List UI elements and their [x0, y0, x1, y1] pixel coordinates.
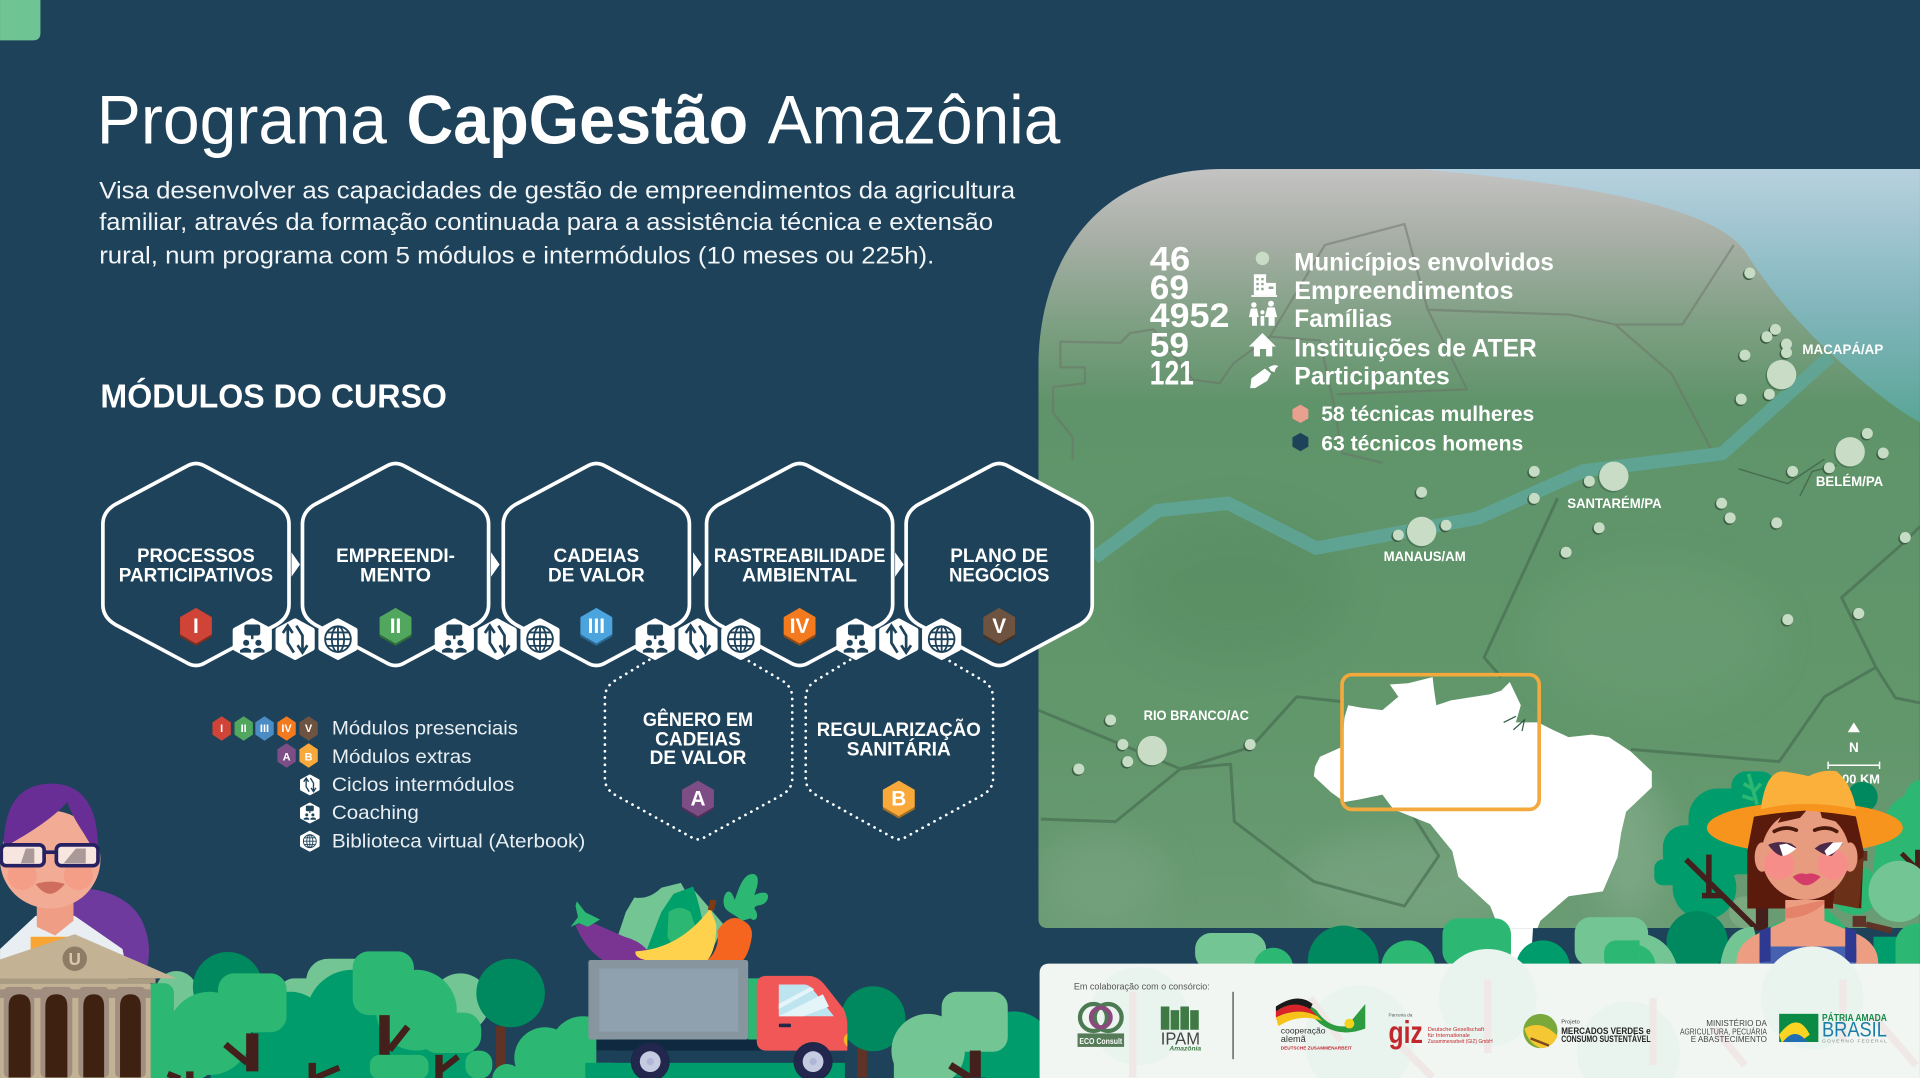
module IV [707, 463, 893, 665]
title: Programa [97, 81, 388, 158]
legend: I [220, 723, 223, 735]
illustration: vegetables [571, 874, 768, 960]
module titles: CADEIAS [553, 546, 639, 567]
compass and scale: N [1849, 740, 1859, 755]
module badges: I [193, 615, 199, 638]
legend [212, 716, 585, 852]
module badges: III [588, 615, 605, 638]
module titles: NEGÓCIOS [949, 565, 1049, 587]
logo: ECO Consult [1078, 1004, 1124, 1047]
river [1094, 356, 1830, 558]
logo: ministério [1680, 1019, 1768, 1044]
legend: Módulos presenciais [332, 719, 518, 740]
intro paragraph: rural, num programa com 5 módulos e intermódulos (10 meses ou 225h). [99, 242, 934, 269]
city labels: RIO BRANCO/AC [1144, 708, 1249, 723]
logo: cooperação alemã: DEUTSCHE ZUSAMMENARBEIT [1281, 1045, 1352, 1050]
illustration: map-edge forest [1040, 917, 1920, 997]
logo: pátria amada brasil [1779, 1013, 1887, 1045]
module badges: V [992, 615, 1006, 638]
logo: mercados verdes: CONSUMO SUSTENTÁVEL [1561, 1034, 1651, 1044]
illustration: right forest [1640, 771, 1920, 972]
stats: labels: Instituições de ATER [1294, 334, 1537, 362]
logo: giz: Zusammenarbeit (GIZ) GmbH [1428, 1039, 1493, 1045]
logo: ministério: AGRICULTURA, PECUÁRIA [1680, 1028, 1767, 1037]
extra module titles [643, 709, 981, 769]
compass and scale [1828, 722, 1880, 787]
logo: pátria amada brasil: PÁTRIA AMADA [1822, 1013, 1887, 1024]
logo: giz [1389, 1012, 1493, 1050]
stats: numbers: 46 [1150, 241, 1190, 279]
logo: pátria amada brasil: BRASIL [1822, 1018, 1887, 1041]
logo: cooperação alemã: cooperação [1281, 1025, 1326, 1035]
module badges [180, 608, 1015, 646]
module titles: RASTREABILIDADE [714, 546, 885, 567]
module titles: PROCESSOS [137, 546, 255, 567]
stats: labels [1294, 249, 1554, 390]
legend: II [241, 723, 247, 735]
panel: partner logos [1040, 946, 1920, 1078]
extra module titles: DE VALOR [650, 748, 747, 769]
legend: IV [281, 723, 292, 735]
stats: labels: Municípios envolvidos [1294, 249, 1554, 277]
legend: V [305, 723, 313, 735]
module I [103, 463, 289, 665]
stats: numbers: 69 [1150, 269, 1189, 307]
module titles: DE VALOR [548, 566, 645, 587]
intro paragraph: Visa desenvolver as capacidades de gestão de empreendimentos da agricultura [99, 177, 1016, 204]
title: CapGestão [407, 81, 748, 158]
stats: labels: Participantes [1294, 362, 1450, 390]
stats: labels: Famílias [1294, 305, 1392, 333]
consortium caption: Em colaboração com o consórcio: [1074, 981, 1210, 991]
extra module titles: GÊNERO EM [643, 709, 753, 731]
stats: icons [1249, 252, 1278, 388]
logo: ECO Consult: ECO Consult [1079, 1036, 1122, 1046]
corner tab [0, 0, 40, 40]
module badges: II [390, 615, 401, 638]
intro paragraph: familiar, através da formação continuada para a assistência técnica e extensão [99, 209, 993, 236]
extra module badges: B [891, 788, 906, 811]
logo: pátria amada brasil: GOVERNO FEDERAL [1822, 1039, 1887, 1045]
illustration: truck [585, 960, 847, 1078]
stats: numbers [1150, 241, 1229, 392]
logo: giz: für Internationale [1428, 1033, 1470, 1039]
module III [503, 463, 689, 665]
intro paragraph [99, 177, 1016, 269]
logo: giz: Parceria da [1389, 1012, 1413, 1017]
legend: III [260, 723, 269, 735]
logo: mercados verdes [1523, 1014, 1651, 1048]
legend: Biblioteca virtual (Aterbook) [332, 831, 585, 852]
logo: giz: giz [1389, 1014, 1423, 1050]
title: Amazônia [768, 81, 1061, 158]
extra module titles: SANITÁRIA [847, 738, 951, 760]
module badges: IV [790, 615, 810, 638]
extra module titles: REGULARIZAÇÃO [817, 719, 981, 741]
city labels: MACAPÁ/AP [1802, 342, 1883, 357]
illustration: right woman farmer [1707, 771, 1903, 964]
stats: numbers: 121 [1150, 354, 1194, 392]
city labels: BELÉM/PA [1816, 474, 1884, 489]
logo: mercados verdes: MERCADOS VERDES e [1561, 1026, 1651, 1036]
logo: giz: Deutsche Gesellschaft [1428, 1027, 1484, 1033]
module II [302, 463, 489, 665]
module V [906, 463, 1092, 665]
legend: B [305, 751, 313, 763]
illustration: left woman teacher [0, 784, 149, 980]
stats: numbers: 59 [1150, 326, 1189, 364]
extra module badges [682, 781, 915, 819]
city labels [1144, 342, 1884, 723]
municipality dots [1072, 268, 1911, 776]
module arrows [291, 552, 904, 577]
city labels: SANTARÉM/PA [1567, 496, 1662, 511]
illustration: university building [0, 934, 176, 1078]
extra module titles: CADEIAS [655, 730, 741, 751]
technician split: 63 técnicos homens [1321, 433, 1523, 456]
module titles: EMPREENDI- [336, 546, 455, 567]
illustration: university building: U [69, 949, 81, 969]
logo: cooperação alemã [1276, 998, 1365, 1050]
logo: IPAM: IPAM [1161, 1028, 1200, 1048]
mini icons between modules [235, 621, 959, 658]
city labels: MANAUS/AM [1384, 549, 1466, 564]
panel: map [1038, 169, 1920, 931]
stats: labels: Empreendimentos [1294, 277, 1513, 305]
compass and scale: 100 KM [1835, 772, 1880, 787]
module titles: PLANO DE [950, 546, 1048, 567]
module titles: AMBIENTAL [742, 566, 857, 587]
title [97, 81, 1061, 158]
logo: cooperação alemã: alemã [1281, 1034, 1307, 1044]
legend: Módulos extras [332, 747, 471, 768]
stats: numbers: 4952 [1150, 297, 1229, 335]
state borders [1038, 498, 1920, 906]
module titles: MENTO [360, 566, 431, 587]
logo: mercados verdes: Projeto [1561, 1020, 1581, 1026]
illustration: left forest [140, 0, 616, 1078]
logo: ministério: MINISTÉRIO DA [1706, 1019, 1768, 1028]
brazil locator map [1314, 675, 1652, 949]
logo: ministério: E ABASTECIMENTO [1691, 1035, 1767, 1044]
logo: IPAM [1161, 1006, 1201, 1053]
module titles [119, 546, 1049, 587]
technician split [1292, 403, 1534, 456]
illustration: truck forest [841, 986, 1053, 1078]
technician split: 58 técnicas mulheres [1321, 403, 1534, 426]
module titles: PARTICIPATIVOS [119, 566, 273, 587]
legend: Coaching [332, 803, 419, 824]
legend: Ciclos intermódulos [332, 775, 514, 796]
extra module badges: A [690, 788, 705, 811]
heading: módulos do curso: MÓDULOS DO CURSO [100, 378, 447, 416]
extra modules: dotted hexagons [605, 656, 993, 839]
legend: A [283, 751, 291, 763]
logo: IPAM: Amazônia [1168, 1046, 1201, 1053]
